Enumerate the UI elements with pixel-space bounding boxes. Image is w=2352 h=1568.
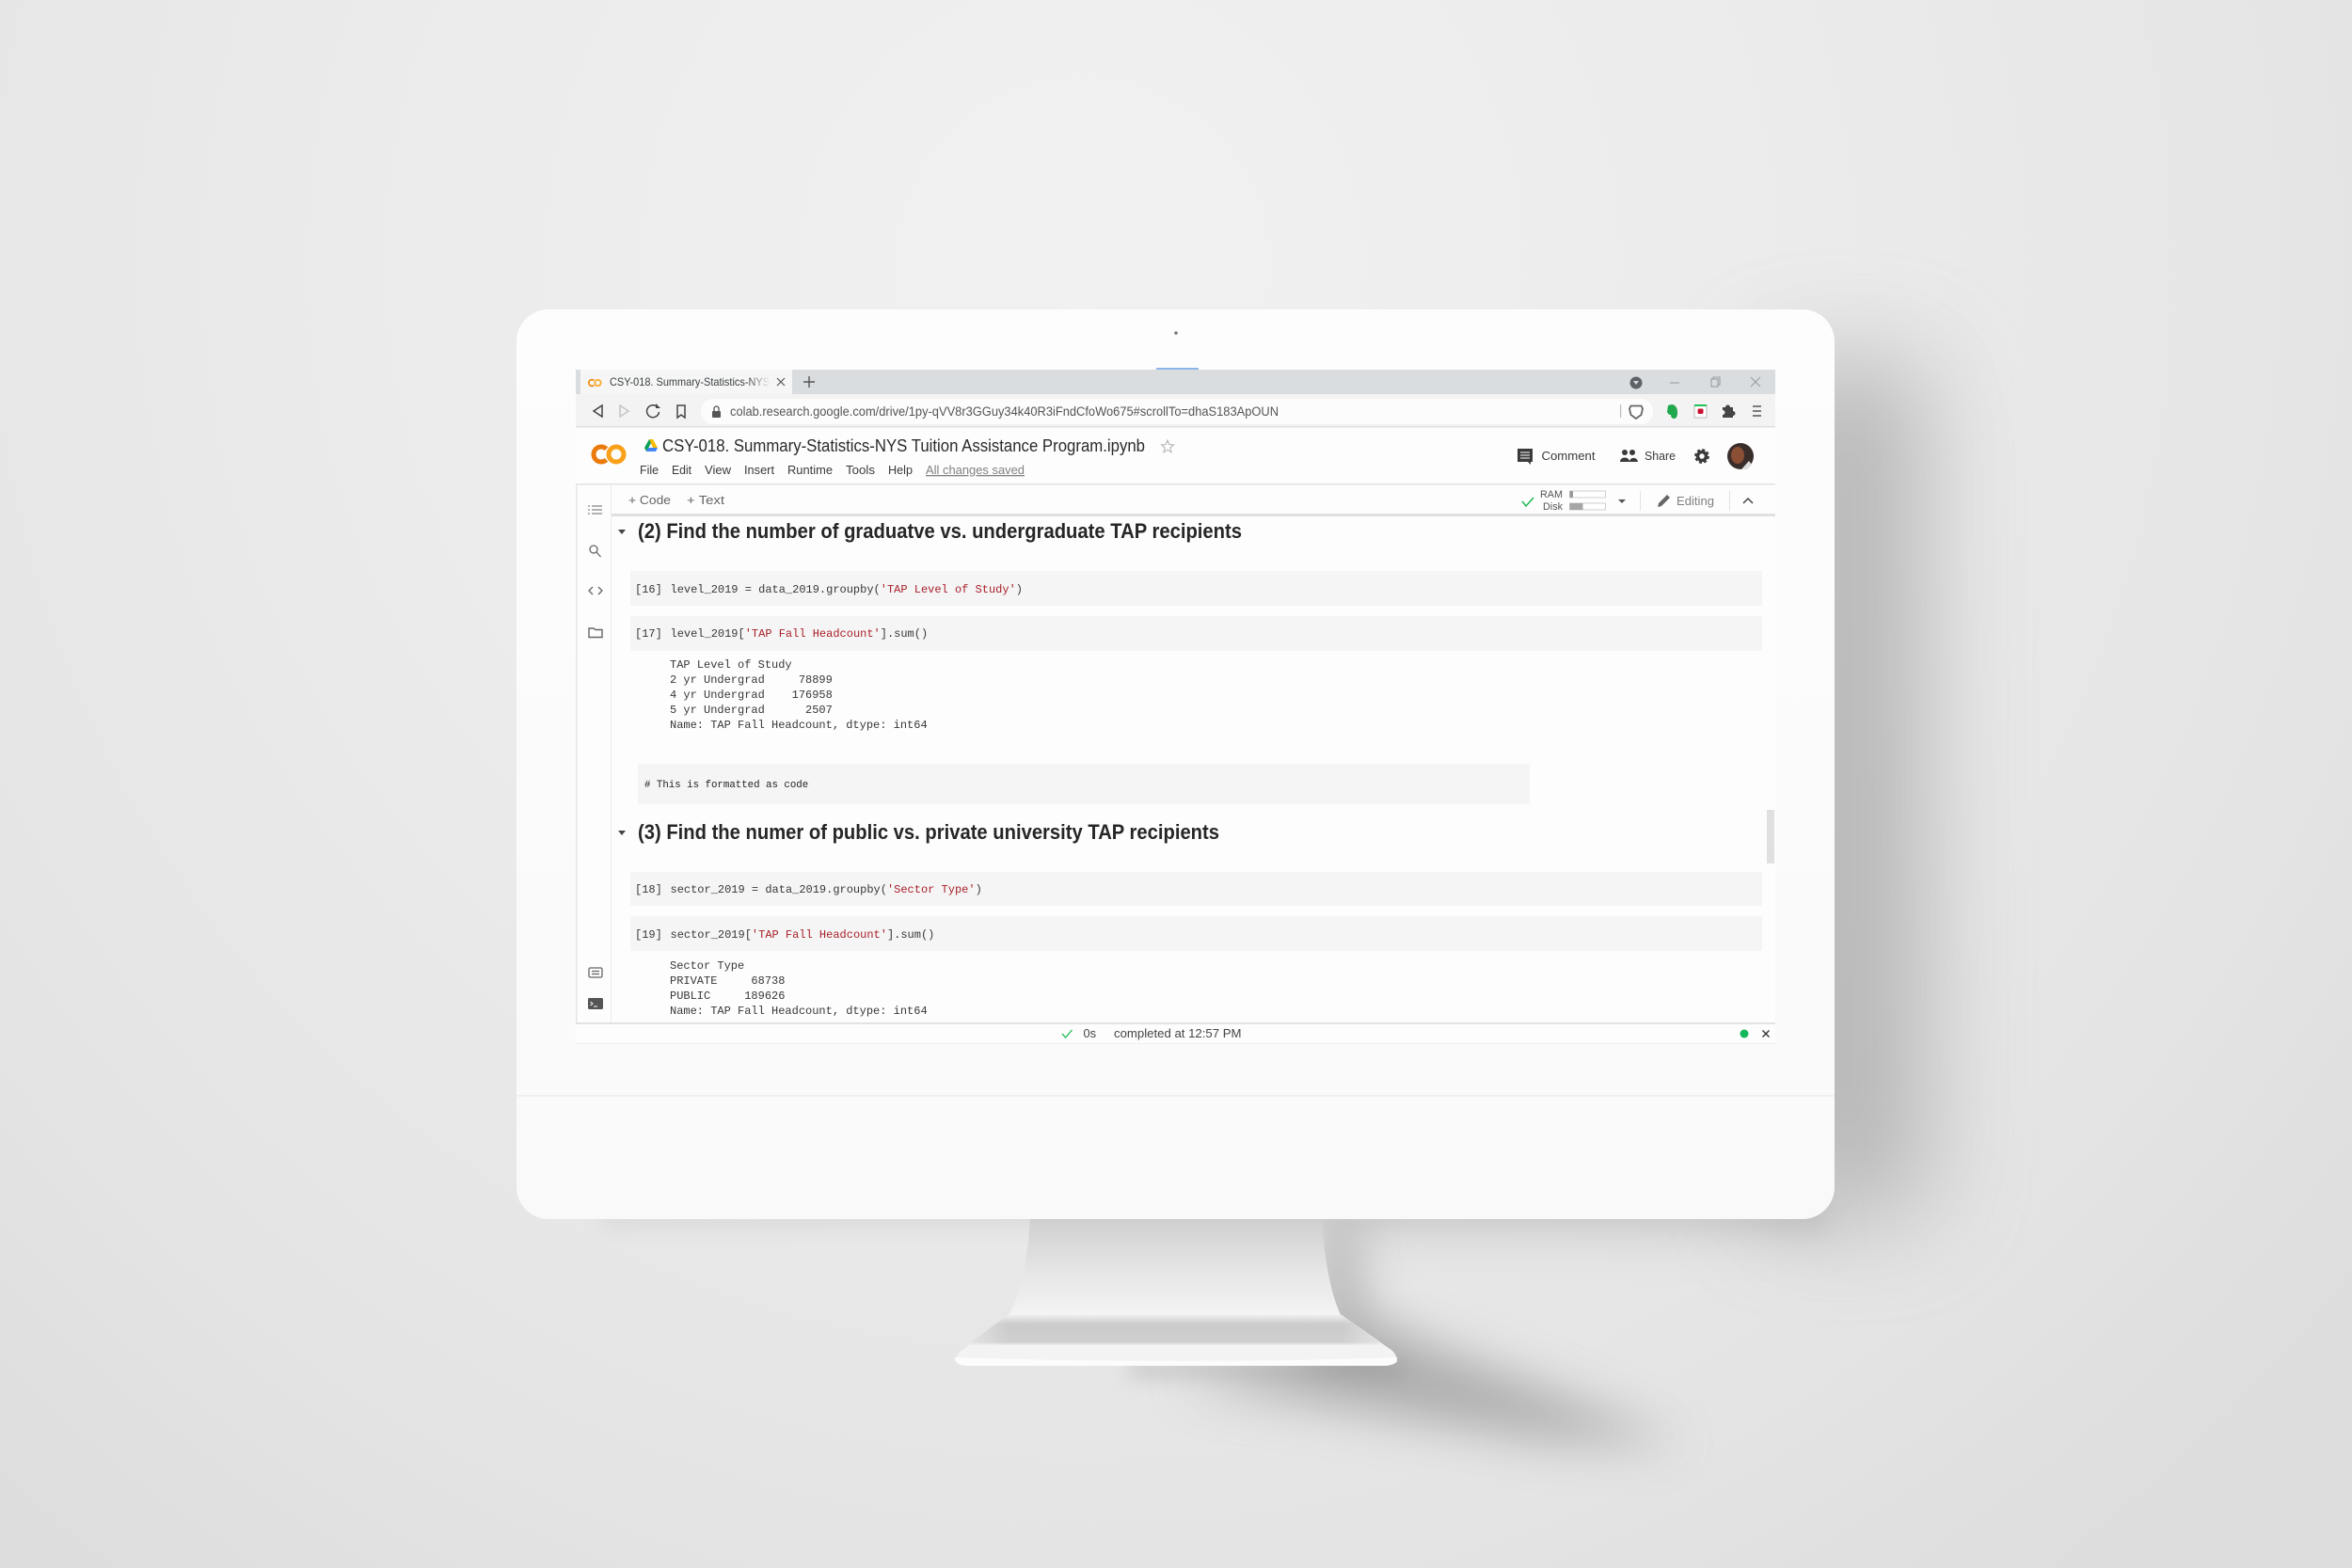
search icon	[590, 546, 600, 557]
code cell 18: sector_2019 = data_2019.groupby('Sector Type')	[670, 883, 982, 896]
drive icon	[644, 439, 658, 451]
output of cell 19: PUBLIC 189626	[670, 990, 785, 1003]
editing mode	[1658, 494, 1714, 508]
menu bar: Edit	[672, 463, 691, 477]
menu bar: Runtime	[787, 463, 833, 477]
new tab plus	[803, 376, 815, 388]
share button	[1620, 449, 1676, 463]
dropdown arrow	[1618, 499, 1626, 503]
output of cell 17: 4 yr Undergrad 176958	[670, 689, 833, 702]
section 3 heading: (3) Find the numer of public vs. private university TAP recipients	[638, 820, 1219, 844]
code cell 17: level_2019['TAP Fall Headcount'].sum()	[670, 627, 928, 641]
ram disk meters: Disk	[1543, 501, 1563, 513]
status bar: 0s	[1084, 1027, 1096, 1040]
code cell 16: level_2019 = data_2019.groupby('TAP Level of Study')	[670, 583, 1023, 596]
code cell 19: sector_2019['TAP Fall Headcount'].sum()	[670, 928, 934, 942]
code cell 19: [19]	[635, 928, 662, 942]
foot front lip	[955, 1357, 1397, 1366]
share button: Share	[1645, 449, 1676, 463]
menu bar: Insert	[744, 463, 774, 477]
notebook title: CSY-018. Summary-Statistics-NYS Tuition Assistance Program.ipynb	[662, 436, 1145, 455]
stand foot	[955, 1315, 1397, 1366]
extension separator	[1620, 404, 1621, 418]
user avatar	[1727, 443, 1754, 469]
comment button	[1518, 449, 1596, 465]
section 2 heading: (2) Find the number of graduatve vs. undergraduate TAP recipients	[638, 519, 1242, 543]
browser window	[576, 368, 1775, 1044]
ram disk meters	[1540, 489, 1605, 513]
code icon	[589, 587, 602, 594]
status bar	[576, 1022, 1775, 1044]
code cell 16	[630, 571, 1762, 606]
collapse chevron	[1743, 499, 1753, 503]
puzzle icon	[1723, 404, 1735, 418]
output of cell 17: TAP Level of Study	[670, 658, 792, 672]
url pill	[701, 399, 1653, 424]
evernote icon	[1667, 404, 1677, 419]
output of cell 17: Name: TAP Fall Headcount, dtype: int64	[670, 719, 928, 732]
colab header	[576, 428, 1775, 485]
monitor cast shadow	[602, 362, 1924, 1230]
code cell 17: [17]	[635, 627, 662, 641]
toc icon	[588, 506, 602, 514]
output of cell 17: 2 yr Undergrad 78899	[670, 673, 833, 687]
output of cell 17: 5 yr Undergrad 2507	[670, 704, 833, 717]
notes icon	[589, 968, 602, 977]
code cell 16: [16]	[635, 583, 662, 596]
output of cell 19: Name: TAP Fall Headcount, dtype: int64	[670, 1005, 928, 1018]
connected check	[1522, 498, 1534, 506]
settings gear	[1695, 450, 1708, 463]
add code button: + Code	[628, 493, 671, 507]
menu bar: All changes saved	[926, 463, 1025, 477]
active tab: CSY-018. Summary-Statistics-NYS	[610, 375, 770, 388]
notebook toolbar	[576, 485, 1775, 516]
active tab	[580, 370, 792, 394]
foot shaded band	[967, 1315, 1383, 1345]
output of cell 19: PRIVATE 68738	[670, 974, 785, 988]
status bar: completed at 12:57 PM	[1114, 1027, 1242, 1040]
colab logo	[594, 447, 624, 462]
editing mode: Editing	[1677, 494, 1714, 508]
foot band side highlight	[967, 1315, 1383, 1345]
top blue indicator	[1156, 368, 1199, 370]
stand neck	[1008, 1219, 1342, 1317]
code cell 19	[630, 916, 1762, 951]
lock icon	[712, 406, 721, 418]
toolbar divider	[1640, 491, 1641, 511]
back forward reload bookmark	[594, 404, 685, 418]
output of cell 17	[670, 658, 928, 732]
left sidebar	[576, 484, 612, 1043]
ram disk meters: RAM	[1540, 489, 1563, 500]
code cell 18: [18]	[635, 883, 662, 896]
code cell 17	[630, 616, 1762, 651]
camera dot	[1174, 331, 1178, 335]
toolbar divider right	[1729, 491, 1730, 511]
code cell 18	[630, 872, 1762, 906]
menu bar: View	[705, 463, 732, 477]
browser tab bar	[576, 370, 1775, 394]
scrollbar	[1767, 810, 1774, 863]
monitor body	[516, 309, 1835, 1219]
monitor stand	[955, 1219, 1397, 1366]
formatted code block: # This is formatted as code	[644, 780, 808, 791]
menu bar: Help	[888, 463, 913, 477]
address bar row	[576, 394, 1775, 427]
terminal icon	[588, 998, 603, 1009]
menu bar: Tools	[846, 463, 875, 477]
comment button: Comment	[1541, 449, 1596, 463]
menu bar	[640, 463, 1025, 477]
brave shield icon	[1629, 406, 1643, 419]
pocket extension icon	[1694, 404, 1707, 418]
output of cell 19: Sector Type	[670, 959, 744, 973]
url text: colab.research.google.com/drive/1py-qVV8r3GGuy34k40R3iFndCfoWo675#scrollTo=dhaS183ApOUN	[730, 404, 1279, 419]
browser menu	[1753, 406, 1761, 416]
profile indicator	[1629, 376, 1643, 389]
chin divider	[516, 1095, 1835, 1097]
star icon	[1161, 440, 1174, 452]
screen background	[576, 370, 1775, 1043]
stand cast shadow	[1129, 1219, 1684, 1444]
menu bar: File	[640, 463, 659, 477]
output of cell 19	[670, 959, 928, 1018]
formatted code block	[638, 764, 1530, 804]
add text button: + Text	[687, 493, 724, 507]
folder icon	[589, 628, 602, 638]
window controls	[1670, 377, 1760, 387]
